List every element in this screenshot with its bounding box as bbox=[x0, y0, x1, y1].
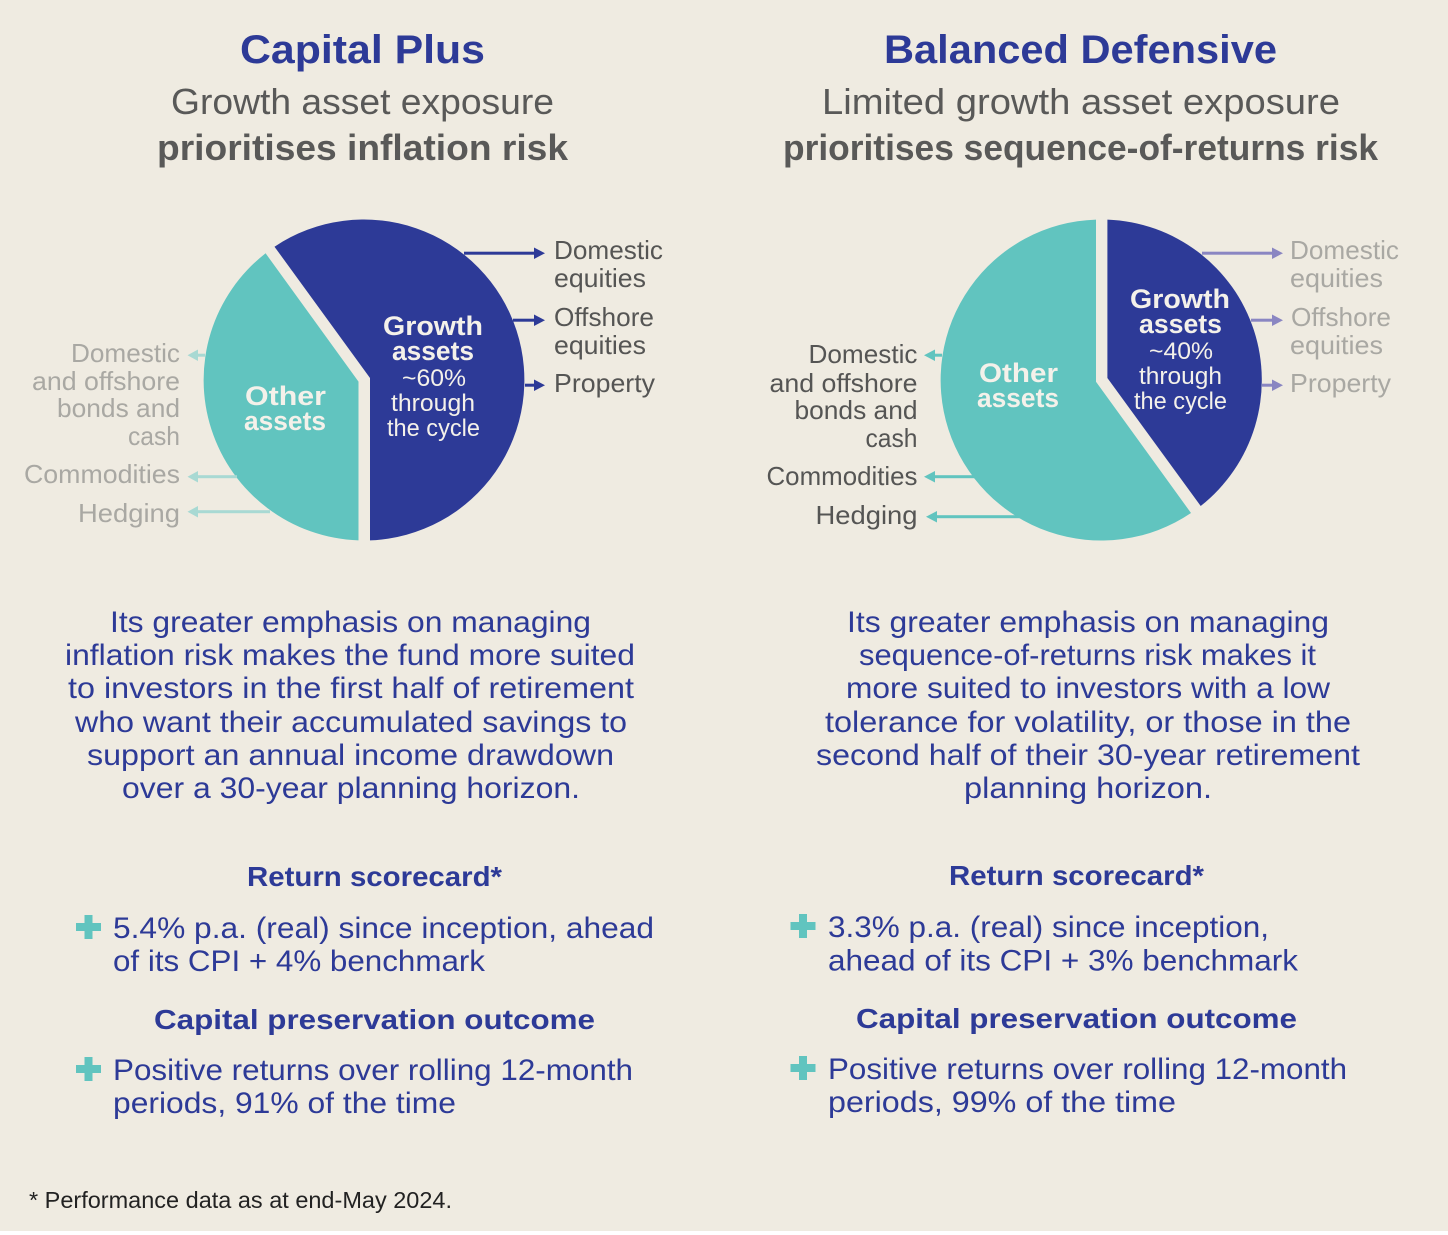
bullet: return: 5.4% p.a. (real) since inception, ahead bbox=[113, 912, 654, 945]
labels: other asset classes: Hedging bbox=[78, 498, 180, 528]
labels: growth asset classes bbox=[554, 235, 663, 398]
text block: Balanced Defensive description: second half of their 30-year retirement bbox=[816, 739, 1361, 772]
pie label: growth assets: through bbox=[1139, 363, 1222, 390]
labels: other asset classes: and offshore bbox=[770, 368, 918, 398]
text block: Capital Plus description: over a 30-year planning horizon. bbox=[122, 772, 580, 805]
pie chart: Balanced Defensive allocation bbox=[941, 220, 1262, 541]
pie label: other assets: Other bbox=[979, 358, 1059, 388]
labels: other asset classes: Domestic bbox=[808, 339, 918, 369]
pie label: growth assets: Growth bbox=[383, 311, 483, 341]
heading: capital preservation: Capital preservation outcome bbox=[154, 1004, 595, 1035]
labels: other asset classes bbox=[24, 338, 180, 528]
pie label: other assets bbox=[977, 358, 1059, 413]
labels: growth asset classes: Offshore bbox=[554, 302, 654, 332]
text block: Balanced Defensive description: planning horizon. bbox=[964, 772, 1212, 805]
labels: other asset classes: Commodities bbox=[24, 459, 180, 489]
pie slice: growth assets bbox=[274, 220, 524, 540]
bullet: preservation: periods, 99% of the time bbox=[828, 1086, 1176, 1119]
text block: Balanced Defensive description: Its greater emphasis on managing bbox=[847, 606, 1329, 639]
text block: Balanced Defensive description: more suited to investors with a low bbox=[846, 672, 1330, 705]
pie label: other assets: Other bbox=[245, 381, 327, 411]
pie label: growth assets: ~40% bbox=[1149, 338, 1213, 365]
text block: Capital Plus description: Its greater emphasis on managing bbox=[110, 606, 591, 639]
heading: return scorecard: Return scorecard* bbox=[949, 860, 1204, 891]
labels: growth asset classes: Domestic bbox=[554, 235, 663, 265]
pie label: growth assets bbox=[1130, 284, 1230, 415]
labels: growth asset classes: equities bbox=[1290, 330, 1383, 360]
bullet: preservation: Positive returns over rolling 12-month bbox=[113, 1054, 633, 1087]
pie label: growth assets: ~60% bbox=[402, 365, 466, 392]
pie label: growth assets: assets bbox=[1139, 309, 1222, 339]
labels: growth asset classes: Offshore bbox=[1291, 302, 1391, 332]
text block: Capital Plus description bbox=[65, 606, 635, 805]
labels: other asset classes: Hedging bbox=[816, 500, 918, 530]
labels: growth asset classes: Property bbox=[554, 368, 655, 398]
pie slice: other assets bbox=[941, 220, 1191, 541]
bullet: preservation: Positive returns over rolling 12-month bbox=[828, 1053, 1347, 1086]
icon: plus bbox=[790, 914, 816, 938]
labels: other asset classes: and offshore bbox=[32, 366, 180, 396]
panel: Balanced Defensive bbox=[766, 28, 1399, 1119]
text block: Capital Plus description: inflation risk makes the fund more suited bbox=[65, 639, 635, 672]
labels: growth asset classes: Property bbox=[1290, 368, 1391, 398]
pie label: growth assets: Growth bbox=[1130, 284, 1230, 314]
text block: Balanced Defensive description: sequence-of-returns risk makes it bbox=[859, 639, 1317, 672]
labels: other asset classes: bonds and bbox=[57, 393, 180, 423]
pie label: growth assets: assets bbox=[392, 336, 474, 366]
arrows: growth asset classes bbox=[1202, 248, 1283, 391]
text block: Capital Plus description: to investors in the first half of retirement bbox=[68, 672, 635, 705]
labels: other asset classes bbox=[766, 339, 918, 530]
icon: plus bbox=[76, 1057, 101, 1081]
text block: Capital Plus description: who want their accumulated savings to bbox=[74, 706, 627, 739]
bullet: return bbox=[113, 912, 654, 978]
bullet: preservation bbox=[828, 1053, 1347, 1119]
footnote: * Performance data as at end-May 2024. bbox=[29, 1187, 452, 1213]
bullet: preservation: periods, 91% of the time bbox=[113, 1087, 456, 1120]
text block: Balanced Defensive description bbox=[816, 606, 1361, 805]
labels: growth asset classes: equities bbox=[554, 330, 646, 360]
pie slice: other assets bbox=[204, 253, 358, 540]
subtitle: Balanced Defensive bbox=[783, 81, 1379, 168]
bullet: return bbox=[828, 911, 1299, 978]
bullet: preservation bbox=[113, 1054, 633, 1120]
subtitle: Balanced Defensive: Limited growth asset exposure bbox=[822, 81, 1340, 122]
title: Capital Plus: Capital Plus bbox=[240, 28, 485, 72]
pie label: other assets: assets bbox=[977, 383, 1059, 413]
bullet: return: of its CPI + 4% benchmark bbox=[113, 945, 486, 978]
heading: capital preservation: Capital preservation outcome bbox=[856, 1003, 1297, 1034]
text block: Balanced Defensive description: tolerance for volatility, or those in the bbox=[825, 706, 1351, 739]
pie label: other assets bbox=[244, 381, 327, 436]
bullet: return: ahead of its CPI + 3% benchmark bbox=[828, 944, 1299, 978]
title: Balanced Defensive: Balanced Defensive bbox=[884, 28, 1277, 72]
subtitle: Capital Plus: prioritises inflation risk bbox=[157, 127, 569, 168]
bullet: return: 3.3% p.a. (real) since inception, bbox=[828, 911, 1269, 944]
pie chart: Capital Plus allocation bbox=[204, 220, 524, 540]
pie label: growth assets: through bbox=[391, 390, 475, 417]
labels: other asset classes: cash bbox=[866, 423, 918, 453]
heading: return scorecard: Return scorecard* bbox=[247, 861, 502, 892]
text block: Capital Plus description: support an annual income drawdown bbox=[87, 739, 614, 772]
icon: plus bbox=[76, 915, 101, 939]
labels: other asset classes: cash bbox=[128, 421, 180, 451]
pie label: other assets: assets bbox=[244, 406, 326, 436]
arrows: other asset classes bbox=[924, 350, 1020, 522]
pie label: growth assets: the cycle bbox=[387, 415, 480, 442]
labels: other asset classes: Commodities bbox=[766, 461, 918, 491]
labels: growth asset classes: equities bbox=[1290, 263, 1383, 293]
icon: plus bbox=[790, 1056, 816, 1080]
arrows: other asset classes bbox=[188, 350, 270, 518]
pie label: growth assets: the cycle bbox=[1134, 388, 1227, 415]
pie slice: growth assets bbox=[1107, 220, 1262, 506]
pie label: growth assets bbox=[383, 311, 483, 442]
labels: other asset classes: bonds and bbox=[794, 395, 918, 425]
subtitle: Capital Plus: Growth asset exposure bbox=[171, 81, 554, 122]
labels: growth asset classes: Domestic bbox=[1290, 235, 1399, 265]
subtitle: Capital Plus bbox=[157, 81, 569, 168]
subtitle: Balanced Defensive: prioritises sequence-of-returns risk bbox=[783, 127, 1379, 168]
labels: other asset classes: Domestic bbox=[71, 338, 180, 368]
labels: growth asset classes bbox=[1290, 235, 1399, 398]
labels: growth asset classes: equities bbox=[554, 263, 646, 293]
arrows: growth asset classes bbox=[464, 248, 545, 391]
panel: Capital Plus bbox=[24, 28, 663, 1120]
